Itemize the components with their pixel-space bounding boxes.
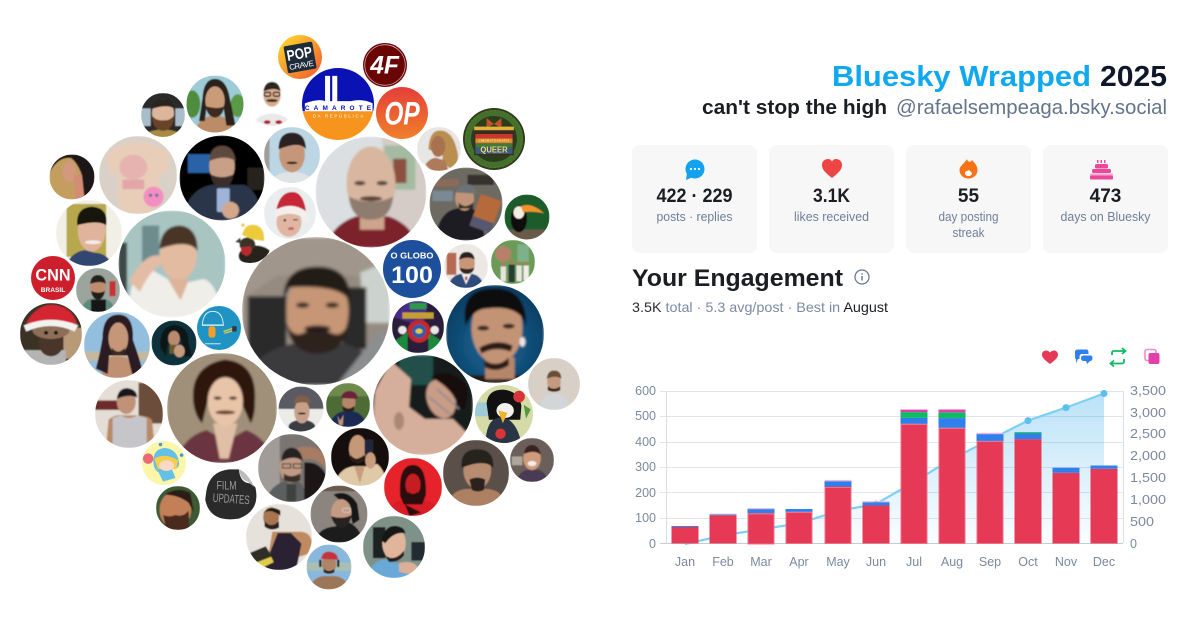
- subtitle: display name and handle: [702, 97, 1167, 119]
- left axis labels: 100: [635, 511, 656, 525]
- avatar: Camarote da Republica logo: [302, 68, 374, 140]
- avatar: blonde woman with hands: [50, 154, 94, 200]
- avatar: man with book at bookshelf: [430, 168, 502, 240]
- avatar: CNN Brasil logo: [31, 256, 75, 300]
- chart: monthly engagement stacked bars with cumulative line: [635, 384, 1166, 569]
- avatar: birdcage illustration: [197, 306, 241, 350]
- legend icons: [1042, 348, 1160, 366]
- left axis labels: [635, 384, 656, 551]
- stat card: day posting streak: streak: [952, 226, 985, 240]
- avatar: OP logo: OP: [384, 95, 420, 131]
- subtitle: display name and handle: can't stop the high: [702, 97, 887, 119]
- month labels: Oct: [1018, 555, 1038, 569]
- heading: Your Engagement: Your Engagement: [632, 265, 843, 292]
- avatar: man in white tank, beige: [528, 358, 580, 410]
- avatar: man on pale blue: [264, 127, 320, 183]
- avatar: O Globo 100 logo: 100: [391, 262, 433, 289]
- stat card: day posting streak: [906, 145, 1031, 253]
- stat card: days on Bluesky: [1043, 145, 1168, 253]
- avatar: blonde woman: [417, 127, 461, 171]
- avatar: young man with hand on head: [118, 210, 226, 318]
- avatar: Cinematografia Queer logo: QUEER: [480, 146, 508, 155]
- avatar: long-haired man, red tint: [384, 458, 442, 516]
- avatar: Camarote da Republica logo: CAMAROTE: [305, 105, 372, 112]
- icon: replies bubbles: [1075, 350, 1092, 364]
- avatar: Film Updates logo: [205, 469, 256, 520]
- avatar: man with beard and glasses, grey: [310, 486, 368, 542]
- avatar: man in blue shirt: [363, 516, 425, 578]
- month labels: Jul: [906, 555, 922, 569]
- avatar: man with glasses, arms behind head: [258, 434, 326, 502]
- avatar: Cinematografia Queer logo: [463, 108, 525, 170]
- avatar: colourful emblem: [392, 301, 444, 353]
- right axis labels: 1,500: [1130, 471, 1166, 485]
- icon: info: [855, 270, 869, 284]
- avatar: man in flat cap: [278, 386, 324, 434]
- icon: heart: [822, 159, 842, 178]
- avatar: Pop Crave logo: POP: [285, 44, 314, 65]
- right axis labels: 3,000: [1130, 406, 1166, 420]
- stat card: days on Bluesky: days on Bluesky: [1060, 210, 1151, 224]
- month labels: Apr: [789, 555, 809, 569]
- month labels: Feb: [712, 555, 734, 569]
- month labels: Jan: [675, 555, 695, 569]
- left axis labels: 300: [635, 460, 656, 474]
- avatar: Film Updates logo: UPDATES: [212, 491, 250, 507]
- avatar: man with moustache on teal: [446, 285, 544, 383]
- title: Bluesky Wrapped 2025: 2025: [1100, 61, 1167, 93]
- avatar: man taking mirror selfie, cream shirt: [331, 428, 389, 486]
- avatar: group in front of green mural: [491, 240, 535, 284]
- avatar: winking man in Santa hat: [264, 187, 316, 239]
- month labels: Jun: [866, 555, 886, 569]
- avatar: Pop Crave logo: [278, 35, 322, 79]
- avatar: CNN Brasil logo: CNN: [35, 266, 71, 285]
- avatar: Cinematografia Queer logo: CINEMATOGRAFIA: [478, 138, 510, 142]
- left axis labels: 400: [635, 435, 656, 449]
- stat card: days on Bluesky: 473: [1090, 186, 1121, 207]
- avatar: Jigglypuff shirt: [99, 136, 177, 214]
- stat card: likes received: likes received: [794, 210, 869, 224]
- avatar: shirtless man with glasses: [373, 355, 473, 455]
- right axis labels: 2,500: [1130, 427, 1166, 441]
- avatar bubble cluster: [20, 35, 580, 590]
- avatar: mirror selfie on black: [180, 136, 264, 220]
- left axis labels: 500: [635, 409, 656, 423]
- avatar: man in black tank top: [246, 504, 312, 570]
- avatar: man with white moustache: [56, 200, 122, 266]
- month labels: Sep: [979, 555, 1001, 569]
- avatar: laughing man: [510, 438, 554, 482]
- avatar: man with peace sign, green: [326, 383, 370, 427]
- avatar: shirtless man with goatee: [443, 440, 509, 506]
- stat card: posts and replies: 422 · 229: [656, 186, 732, 207]
- avatar: bald man, maroon shirt: [316, 136, 426, 248]
- month labels: Nov: [1055, 555, 1078, 569]
- stat card: likes received: 3.1K: [813, 186, 850, 207]
- avatar: Camarote da Republica logo: DA REPÚBLICA: [313, 114, 363, 119]
- right axis labels: 500: [1130, 515, 1154, 529]
- stat card: likes received: [769, 145, 894, 253]
- avatar: main profile, man in car: [242, 237, 390, 385]
- icon: cake: [1090, 160, 1113, 180]
- avatar: bearded man: [141, 93, 185, 137]
- avatar: man in white tank top: [95, 380, 163, 448]
- right axis labels: [1130, 384, 1166, 551]
- avatar: man in red cap at beach: [306, 544, 352, 590]
- avatar: bearded man close-up: [156, 486, 200, 530]
- icon: reposts arrows: [1110, 348, 1126, 366]
- avatar: O Globo 100 logo: O GLOBO: [391, 251, 434, 261]
- icon: flame: [960, 159, 978, 178]
- left axis labels: 0: [649, 537, 656, 551]
- icon: speech bubble: [686, 160, 704, 180]
- avatar: O Globo 100 logo: [383, 240, 441, 298]
- month labels: Aug: [941, 555, 963, 569]
- avatar: man with curly hair: [167, 353, 277, 463]
- month labels: May: [826, 555, 851, 569]
- avatar: man with glasses and moustache: [256, 81, 288, 126]
- avatar: long-haired man, sky: [84, 312, 150, 378]
- icon: quotes stacked squares: [1145, 350, 1160, 364]
- subtitle: display name and handle: @rafaelsempeaga.bsky.social: [896, 97, 1167, 119]
- cumulative area and line: [685, 390, 1108, 544]
- avatar: long-haired man at beach: [186, 76, 244, 132]
- stat card: posts and replies: [632, 145, 757, 253]
- avatar: man with coffee cup: [152, 320, 196, 366]
- avatar: bearded man with red object: [76, 268, 120, 312]
- month labels: [675, 555, 1115, 569]
- avatar: 4F logo: 4F: [369, 52, 400, 79]
- title: Bluesky Wrapped 2025: Bluesky Wrapped: [832, 61, 1091, 93]
- avatar: CNN Brasil logo: BRASIL: [41, 287, 65, 294]
- avatar: cartoon bird with flowers: [475, 385, 533, 443]
- stat card: posts and replies: posts · replies: [656, 210, 732, 224]
- right axis labels: 3,500: [1130, 384, 1166, 398]
- text: engagement summary: 3.5K total · 5.3 avg/post · Best in August: [632, 299, 888, 315]
- stat card: day posting streak: day posting: [938, 210, 999, 224]
- right axis labels: 1,000: [1130, 493, 1166, 507]
- avatar: toucan: [504, 194, 550, 240]
- icon: likes heart: [1042, 350, 1058, 364]
- avatar: 4F logo: [363, 43, 407, 87]
- avatar: Pop Crave logo: CRAVE: [289, 59, 314, 72]
- avatar: cartoon character with lollipop: [142, 441, 186, 485]
- left axis labels: 600: [635, 384, 656, 398]
- month labels: Mar: [750, 555, 772, 569]
- avatar: rooster in yellow helmet: [234, 222, 270, 263]
- right axis labels: 2,000: [1130, 449, 1166, 463]
- left axis labels: 200: [635, 486, 656, 500]
- avatar: gremlin in Santa hat: [20, 303, 82, 365]
- stacked bars: likes, replies, reposts, quotes: [672, 410, 1118, 544]
- grid lines and axes: [660, 391, 1124, 544]
- avatar: Film Updates logo: FILM: [216, 479, 237, 493]
- month labels: Dec: [1093, 555, 1115, 569]
- right axis labels: 0: [1130, 537, 1137, 551]
- avatar: man in suit: [444, 244, 488, 288]
- avatar: OP logo: [376, 87, 428, 139]
- stat card: day posting streak: 55: [958, 186, 979, 207]
